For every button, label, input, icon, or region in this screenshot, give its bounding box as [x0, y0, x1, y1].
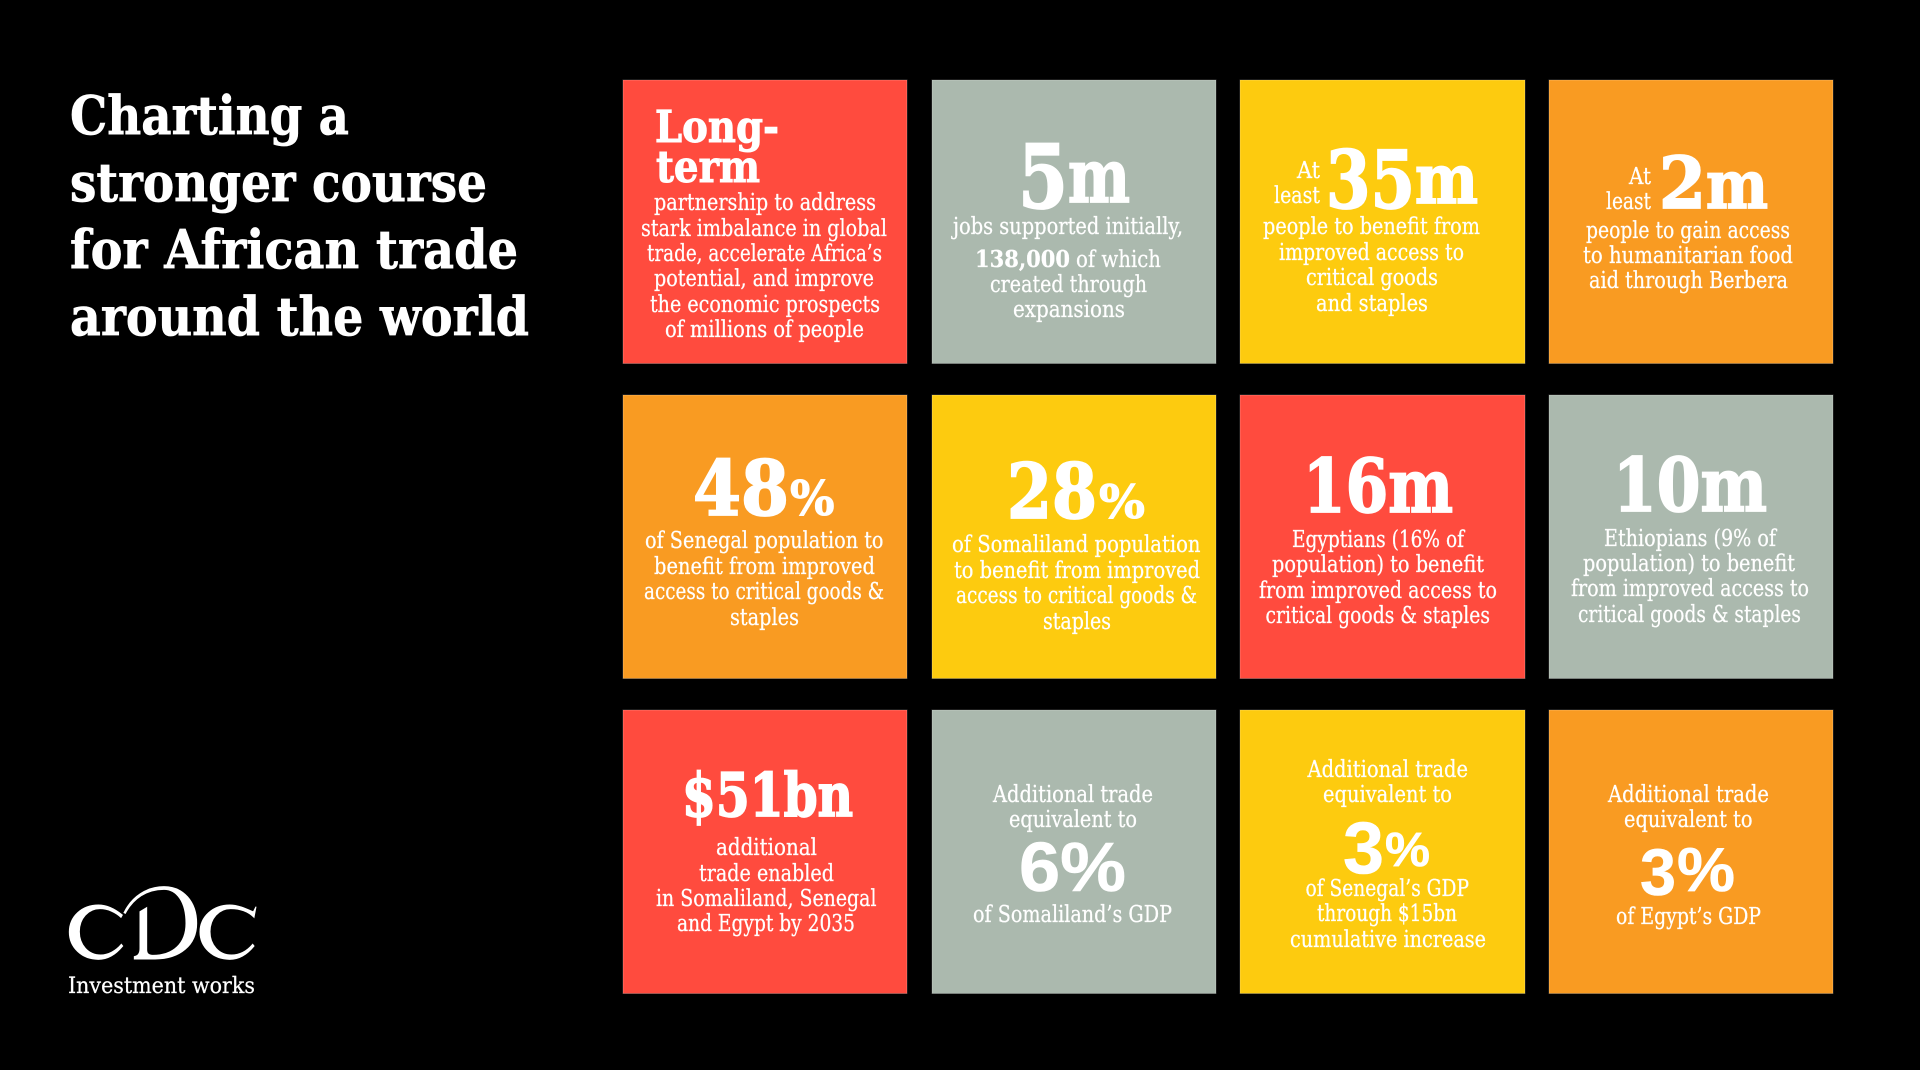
text block: of which [1076, 247, 1161, 273]
text block: cumulative increase [1290, 927, 1486, 953]
tagline: Investment works [68, 974, 255, 999]
text line: of Egypt’s GDP [1616, 904, 1761, 930]
big number: 5m [1018, 125, 1130, 229]
text block: access to critical goods & [644, 579, 884, 605]
text block: Additional trade [992, 782, 1153, 808]
text block: expansions [1013, 297, 1125, 323]
text block: people to benefit from [1263, 214, 1480, 240]
panel: 2m people [1549, 80, 1833, 364]
big text: Long-term: term [656, 142, 760, 193]
text block: benefit from improved [654, 554, 875, 580]
text block: 138,000 [975, 246, 1070, 273]
text block: equivalent to [1323, 782, 1452, 808]
big number: at least 35m [1274, 133, 1478, 227]
text block: of Senegal’s GDP [1306, 876, 1469, 902]
big number: at least 2m: At [1628, 164, 1652, 190]
text block: jobs supported initially, [950, 214, 1183, 240]
big number: 3% [1640, 835, 1735, 909]
big number: 3%: % [1677, 836, 1735, 905]
big number: $51bn: $51bn [682, 761, 853, 831]
panel: 28% Somaliland [932, 395, 1216, 678]
big number: at least 2m [1606, 141, 1768, 225]
text block: staples [1043, 609, 1111, 635]
text block: population) to benefit [1583, 551, 1796, 577]
big number: 48%: 48 [693, 444, 789, 533]
big number: 10m: 10m [1613, 443, 1767, 529]
text block: equivalent to [1009, 807, 1137, 833]
big number: 6%: 6% [1019, 828, 1126, 906]
big number: at least 2m: 2 [1659, 141, 1706, 225]
title: Charting a [70, 85, 349, 147]
text block: Additional trade [1607, 782, 1769, 808]
big number: 3%: 3 [1640, 835, 1676, 909]
text block: of millions of people [665, 317, 864, 343]
big text: Long-term: Long- [655, 102, 779, 153]
text block: stark imbalance in global [641, 216, 887, 242]
text block: aid through Berbera [1589, 268, 1788, 294]
panel: 3% Senegal GDP [1240, 710, 1525, 994]
text block: from improved access to [1259, 578, 1497, 604]
big number: at least 35m: m [1415, 140, 1478, 220]
panel: 6% Somaliland GDP [932, 710, 1216, 994]
text block: population) to benefit [1272, 552, 1485, 578]
panel: 10m Ethiopians [1549, 395, 1833, 678]
text block: in Somaliland, Senegal [656, 886, 876, 912]
title: stronger course [70, 152, 487, 214]
panel: 3% Egypt GDP [1549, 710, 1833, 994]
text block [1263, 214, 1480, 317]
big number: at least 35m: At [1296, 158, 1321, 184]
panel: 16m Egyptians [1240, 395, 1525, 678]
text block: people to gain access [1586, 218, 1790, 244]
panel: 5m jobs [932, 80, 1216, 364]
text block [641, 190, 887, 343]
text block [1583, 218, 1793, 294]
text block: the economic prospects [650, 292, 880, 318]
text block: equivalent to [1624, 807, 1752, 833]
text block [1607, 782, 1769, 833]
big number: 5m: 5 [1018, 125, 1068, 229]
text block [1290, 876, 1486, 953]
text block: Ethiopians (9% of [1604, 526, 1777, 552]
text block [1571, 526, 1809, 628]
text block: critical goods & staples [1578, 602, 1801, 628]
text block: of Senegal population to [645, 528, 884, 554]
text block: through $15bn [1317, 901, 1457, 927]
big number: 48%: % [790, 471, 834, 527]
panel: 35m people [1240, 80, 1525, 364]
title: for African trade [70, 219, 518, 281]
text block: partnership to address [654, 190, 876, 216]
text block [950, 214, 1183, 323]
big text: Long-term [655, 102, 779, 193]
big number: 28%: 28 [1007, 447, 1097, 536]
big number: 3%: 3 [1343, 808, 1384, 889]
text block: Additional trade [1307, 757, 1468, 783]
big number: 16m: 16m [1303, 444, 1453, 530]
text block: Egyptians (16% of [1292, 527, 1465, 553]
logo: CDC Investment works [68, 887, 256, 999]
text block: to humanitarian food [1583, 243, 1793, 269]
text block: trade enabled [699, 861, 834, 887]
panel: $51bn trade [623, 710, 907, 994]
title: around the world [70, 286, 529, 348]
text block [644, 528, 884, 631]
text block: potential, and improve [654, 266, 874, 292]
text block: staples [730, 605, 799, 631]
text block [1259, 527, 1497, 629]
big number: at least 2m: least [1606, 189, 1652, 215]
text block: trade, accelerate Africa’s [647, 241, 882, 267]
text block [992, 782, 1153, 833]
text block [952, 532, 1201, 635]
panel: long-term partnership [623, 80, 907, 364]
text block: additional [716, 835, 817, 861]
title [70, 85, 529, 348]
icon: CDC wordmark [69, 887, 256, 959]
big number: at least 2m: m [1706, 146, 1768, 224]
text block: from improved access to [1571, 576, 1809, 602]
text block: of Somaliland population [952, 532, 1201, 558]
text block: and Egypt by 2035 [677, 911, 855, 937]
text block: and staples [1316, 291, 1428, 317]
text block: created through [990, 272, 1147, 298]
big number: 3%: % [1385, 824, 1430, 877]
text block: access to critical goods & [956, 583, 1197, 609]
text block [656, 835, 876, 937]
text block [1307, 757, 1468, 808]
big number: at least 35m: least [1274, 183, 1321, 209]
text block: to benefit from improved [954, 558, 1200, 584]
text line: of Somaliland’s GDP [973, 902, 1172, 928]
big number: at least 35m: 35 [1326, 133, 1415, 227]
panel: 48% Senegal [623, 395, 907, 678]
big number: 5m: m [1068, 134, 1130, 220]
text block: critical goods & staples [1266, 603, 1490, 629]
text block: improved access to [1279, 240, 1464, 266]
big number: 3% [1343, 808, 1430, 889]
text block: critical goods [1306, 265, 1438, 291]
big number: 28%: % [1099, 475, 1145, 529]
